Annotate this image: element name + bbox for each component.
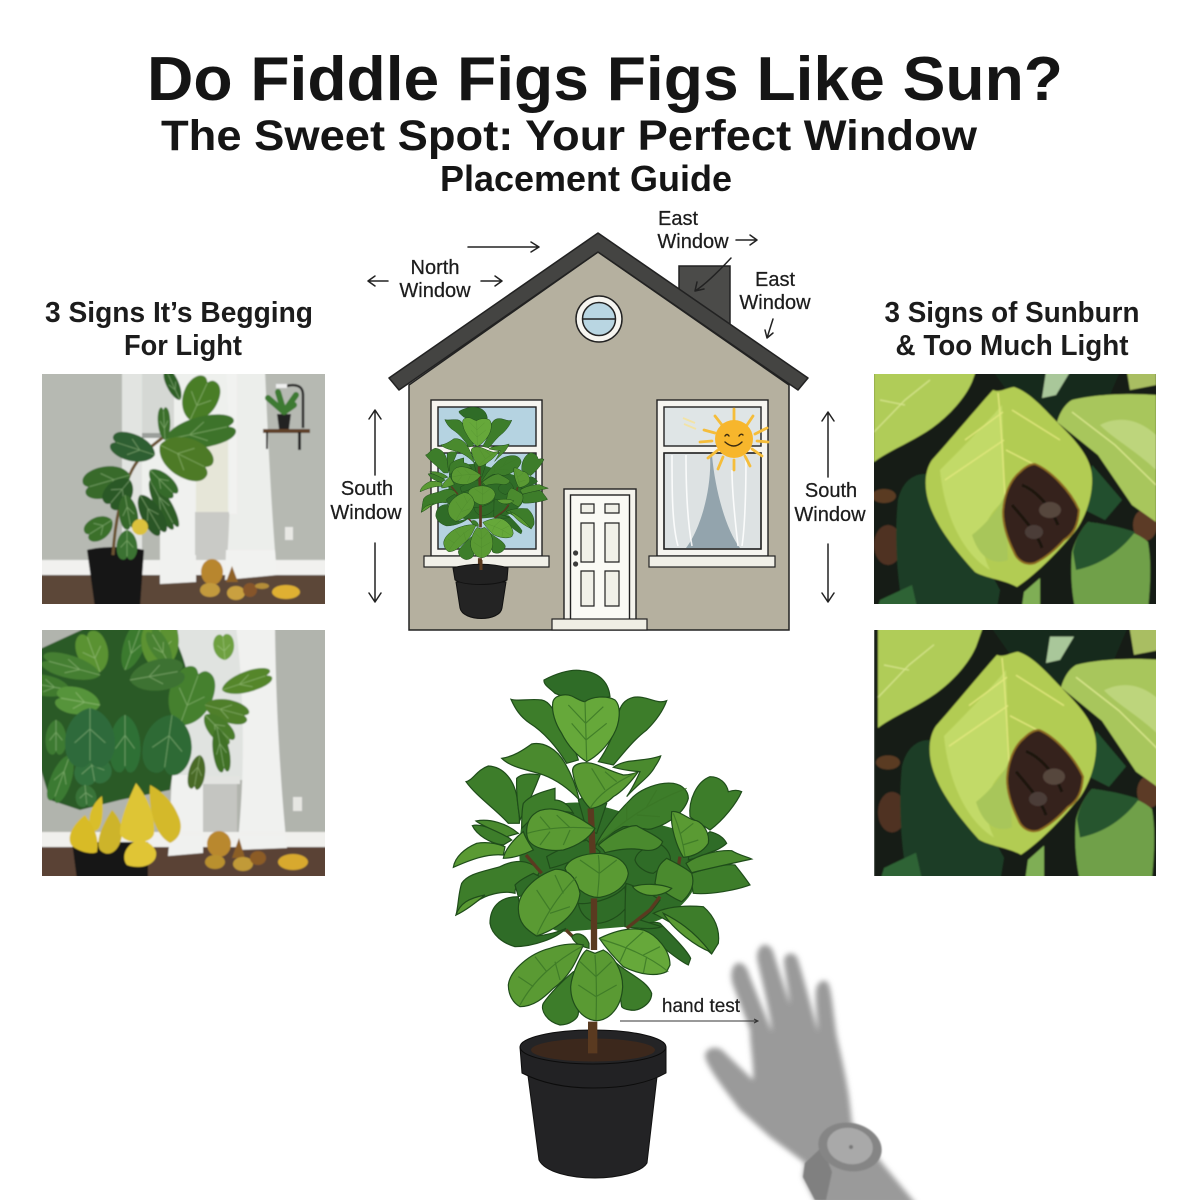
label: hand test — [620, 996, 758, 1023]
heading: signs of sunburn — [884, 297, 1140, 362]
label: north window: North — [411, 257, 459, 279]
small pot — [453, 560, 508, 618]
subtitle: The Sweet Spot: Your Perfect Window — [161, 112, 978, 160]
heading: signs of low light: 3 Signs It’s Begging — [45, 297, 313, 329]
photo: sunburned leaf — [874, 374, 1156, 604]
heading: signs of sunburn: & Too Much Light — [896, 330, 1129, 362]
label: south window right: Window — [794, 504, 866, 526]
house diagram — [389, 233, 808, 630]
label: south window left — [330, 410, 402, 602]
label: south window left: South — [341, 478, 393, 500]
house wall — [409, 252, 789, 630]
label: south window right — [794, 412, 866, 602]
large potted fiddle fig — [453, 670, 752, 1178]
label: south window left: Window — [330, 502, 402, 524]
label: east window right: East — [755, 269, 795, 291]
subtitle second line: Placement Guide — [440, 158, 732, 199]
left window — [424, 400, 549, 567]
label: north window — [368, 242, 539, 302]
sun icon with smiling face — [683, 409, 768, 470]
label: south window right: South — [805, 480, 857, 502]
title: Do Fiddle Figs Figs Like Sun? — [147, 45, 1063, 114]
pot — [520, 1030, 666, 1178]
label: north window: Window — [399, 280, 471, 302]
hand shadow for the hand test — [705, 945, 917, 1200]
wristwatch — [803, 1117, 886, 1200]
photo: sunburned leaf close-up — [874, 624, 1164, 888]
photo: leggy fiddle fig dropping leaves — [38, 369, 329, 608]
right window with curtains — [649, 400, 775, 567]
heading: signs of low light: For Light — [124, 330, 242, 362]
chimney — [679, 266, 730, 336]
label: east window right: Window — [739, 292, 811, 314]
door — [552, 489, 647, 630]
label: hand test: hand test — [662, 996, 741, 1017]
heading: signs of low light — [45, 297, 313, 362]
label: east window top: East — [658, 208, 698, 230]
roof — [389, 233, 808, 390]
label: east window right — [739, 269, 811, 338]
label: east window top — [657, 208, 757, 291]
heading: signs of sunburn: 3 Signs of Sunburn — [884, 297, 1140, 329]
plant foliage and trunk — [453, 670, 752, 1053]
round attic window — [576, 296, 622, 342]
label: east window top: Window — [657, 231, 729, 253]
photo: yellowing fiddle fig — [42, 630, 325, 876]
small fiddle fig — [420, 407, 548, 572]
